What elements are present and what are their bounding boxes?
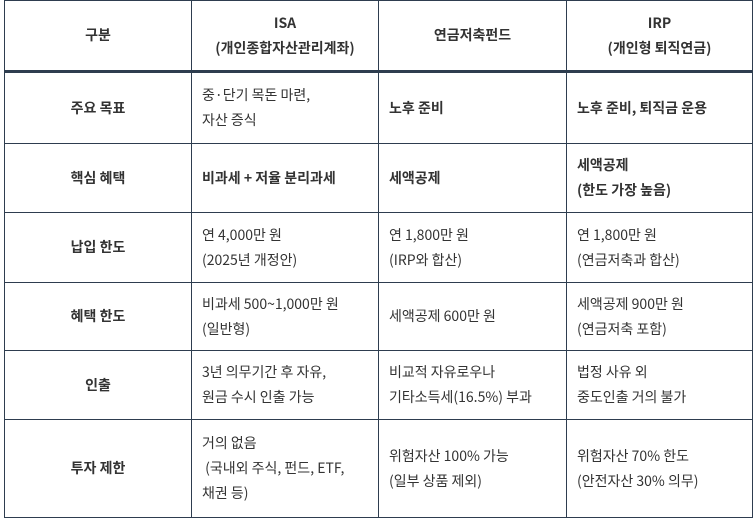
row: 인출: 중도인출 거의 불가 xyxy=(577,387,686,407)
row: 인출: 3년 의무기간 후 자유, xyxy=(202,362,326,382)
header row: 구분 xyxy=(85,25,111,45)
row: 투자 제한: (국내외 주식, 펀드, ETF, xyxy=(205,458,344,478)
row: 주요 목표: 주요 목표 xyxy=(71,98,125,118)
row: 주요 목표: 중·단기 목돈 마련, xyxy=(202,85,310,105)
header row: (개인형 퇴직연금) xyxy=(608,38,711,58)
row: 투자 제한: 채권 등) xyxy=(202,483,249,503)
row: 주요 목표: 노후 준비 xyxy=(389,98,444,118)
header row: (개인종합자산관리계좌) xyxy=(215,38,355,58)
row: 주요 목표 xyxy=(71,85,707,130)
row: 인출: 법정 사유 외 xyxy=(577,362,648,382)
row: 인출: 기타소득세(16.5%) 부과 xyxy=(389,387,532,407)
row: 혜택 한도: (연금저축 포함) xyxy=(577,318,667,338)
row: 핵심 혜택: 세액공제 xyxy=(389,168,441,188)
row: 주요 목표: 자산 증식 xyxy=(202,110,257,130)
row: 납입 한도: (2025년 개정안) xyxy=(202,250,297,270)
row: 인출 xyxy=(85,362,686,407)
row: 핵심 혜택: 비과세 + 저율 분리과세 xyxy=(202,168,336,188)
header row: 연금저축펀드 xyxy=(434,25,511,45)
row: 핵심 혜택: (한도 가장 높음) xyxy=(577,180,671,200)
row: 투자 제한: 투자 제한 xyxy=(71,458,125,478)
row: 인출: 인출 xyxy=(85,374,111,394)
row: 투자 제한: 위험자산 100% 가능 xyxy=(389,446,509,466)
row: 핵심 혜택: 핵심 혜택 xyxy=(71,168,125,188)
row: 주요 목표: 노후 준비, 퇴직금 운용 xyxy=(577,98,707,118)
row: 납입 한도: 연 1,800만 원 xyxy=(577,224,657,244)
row: 투자 제한: (안전자산 30% 의무) xyxy=(577,470,698,490)
row: 투자 제한 xyxy=(71,433,698,503)
row: 납입 한도: 납입 한도 xyxy=(71,237,125,257)
row: 핵심 혜택 xyxy=(71,155,671,200)
row: 납입 한도 xyxy=(71,224,680,270)
row: 혜택 한도: 세액공제 600만 원 xyxy=(389,306,496,326)
row: 납입 한도: (IRP와 합산) xyxy=(389,250,462,270)
row: 납입 한도: (연금저축과 합산) xyxy=(577,250,680,270)
header row: IRP xyxy=(648,12,671,32)
row: 혜택 한도 xyxy=(71,294,684,338)
row: 인출: 비교적 자유로우나 xyxy=(389,362,495,382)
row: 핵심 혜택: 세액공제 xyxy=(577,155,629,175)
row: 투자 제한: 거의 없음 xyxy=(202,433,257,453)
row: 인출: 원금 수시 인출 가능 xyxy=(202,387,314,407)
row: 투자 제한: 위험자산 70% 한도 xyxy=(577,446,689,466)
row: 혜택 한도: (일반형) xyxy=(202,318,250,338)
header row: ISA xyxy=(274,12,296,32)
row: 투자 제한: (일부 상품 제외) xyxy=(389,470,482,490)
row: 혜택 한도: 세액공제 900만 원 xyxy=(577,294,684,314)
row: 납입 한도: 연 1,800만 원 xyxy=(389,224,469,244)
row: 혜택 한도: 비과세 500~1,000만 원 xyxy=(202,294,339,314)
row: 납입 한도: 연 4,000만 원 xyxy=(202,224,282,244)
row: 혜택 한도: 혜택 한도 xyxy=(71,306,125,326)
